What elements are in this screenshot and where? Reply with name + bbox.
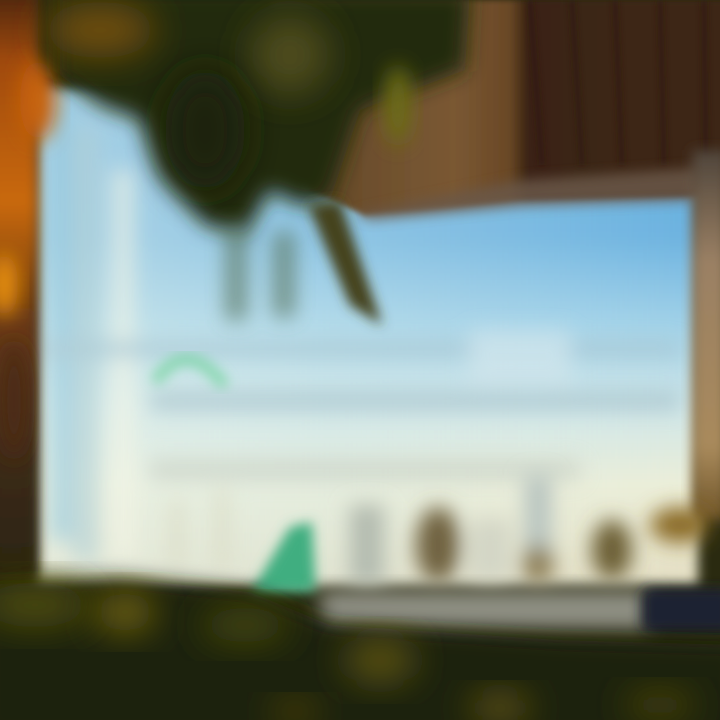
green sail accent — [250, 522, 316, 594]
skyline silhouettes — [350, 475, 710, 585]
roof edge — [355, 168, 700, 220]
palm fronds — [45, 0, 470, 325]
dark vehicle — [642, 588, 720, 632]
right post — [692, 150, 720, 520]
roof slats — [530, 0, 706, 165]
hanging frond tips — [226, 225, 294, 320]
wooden roof overhang — [270, 0, 720, 220]
foreground shrubs — [0, 578, 720, 720]
green arc accent — [155, 359, 225, 386]
faint building columns and horizontal haze — [40, 100, 680, 570]
palm trunk — [0, 0, 56, 580]
ground strip — [320, 590, 650, 630]
